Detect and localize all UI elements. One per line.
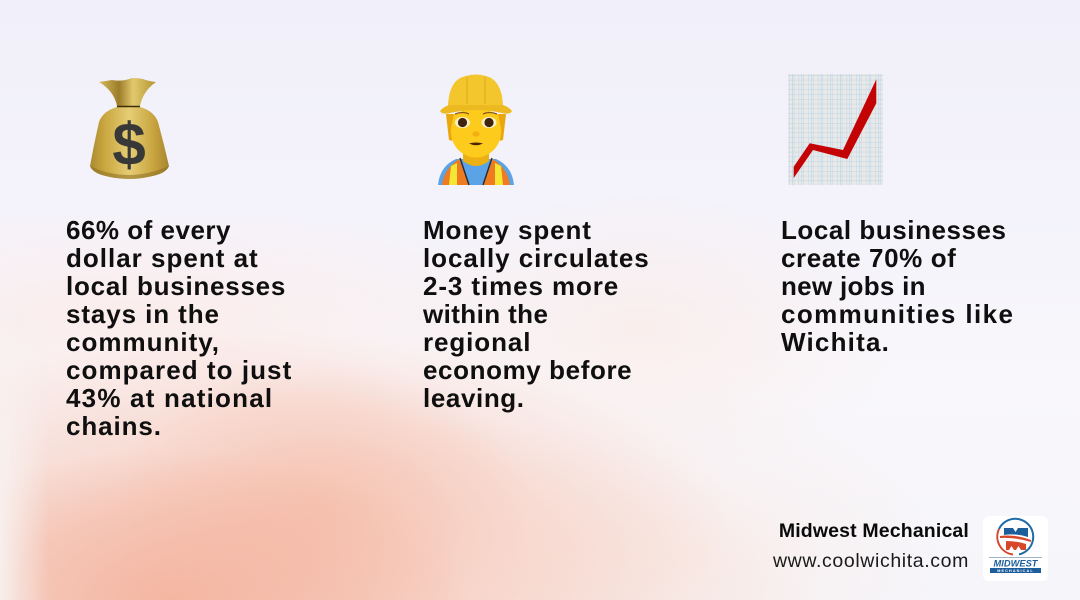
shoulders and vest <box>438 158 514 185</box>
logo: MECHANICAL <box>997 569 1034 573</box>
text block: jobs <box>781 215 1014 357</box>
website: www.coolwichita.com <box>773 550 969 572</box>
logo: MIDWEST <box>994 558 1039 570</box>
company name: Midwest Mechanical <box>779 520 969 542</box>
text block: local dollars: stays in the <box>66 299 220 329</box>
text block: local dollars: 43% at national <box>66 383 273 413</box>
text block: local dollars: community, <box>66 327 220 357</box>
text block: local dollars: local businesses <box>66 271 286 301</box>
text block: jobs: communities like <box>781 299 1014 329</box>
text block: circulation: Money spent <box>423 215 592 245</box>
text block: circulation: leaving. <box>423 383 525 413</box>
dollar sign: $ <box>112 111 146 178</box>
text block: circulation: locally circulates <box>423 243 650 273</box>
logo <box>983 516 1048 581</box>
text block: local dollars <box>66 215 292 441</box>
text block: local dollars: compared to just <box>66 355 292 385</box>
text block: circulation: regional <box>423 327 531 357</box>
text block: circulation: economy before <box>423 355 632 385</box>
icon: chart increasing <box>788 74 883 185</box>
text block: circulation: 2-3 times more <box>423 271 619 301</box>
text block: circulation <box>422 215 650 413</box>
text block: jobs: Wichita. <box>781 327 890 357</box>
text block: jobs: create 70% of <box>781 243 956 273</box>
text block: local dollars: dollar spent at <box>66 243 259 273</box>
text block: local dollars: 66% of every <box>66 215 231 245</box>
hard hat <box>440 74 512 114</box>
text block: circulation: within the <box>423 299 548 329</box>
text block: jobs: new jobs in <box>781 271 926 301</box>
icon: money bag <box>90 78 169 179</box>
face <box>446 106 506 166</box>
text block: jobs: Local businesses <box>781 215 1007 245</box>
text block: local dollars: chains. <box>66 411 162 441</box>
icon: construction worker <box>438 74 514 186</box>
